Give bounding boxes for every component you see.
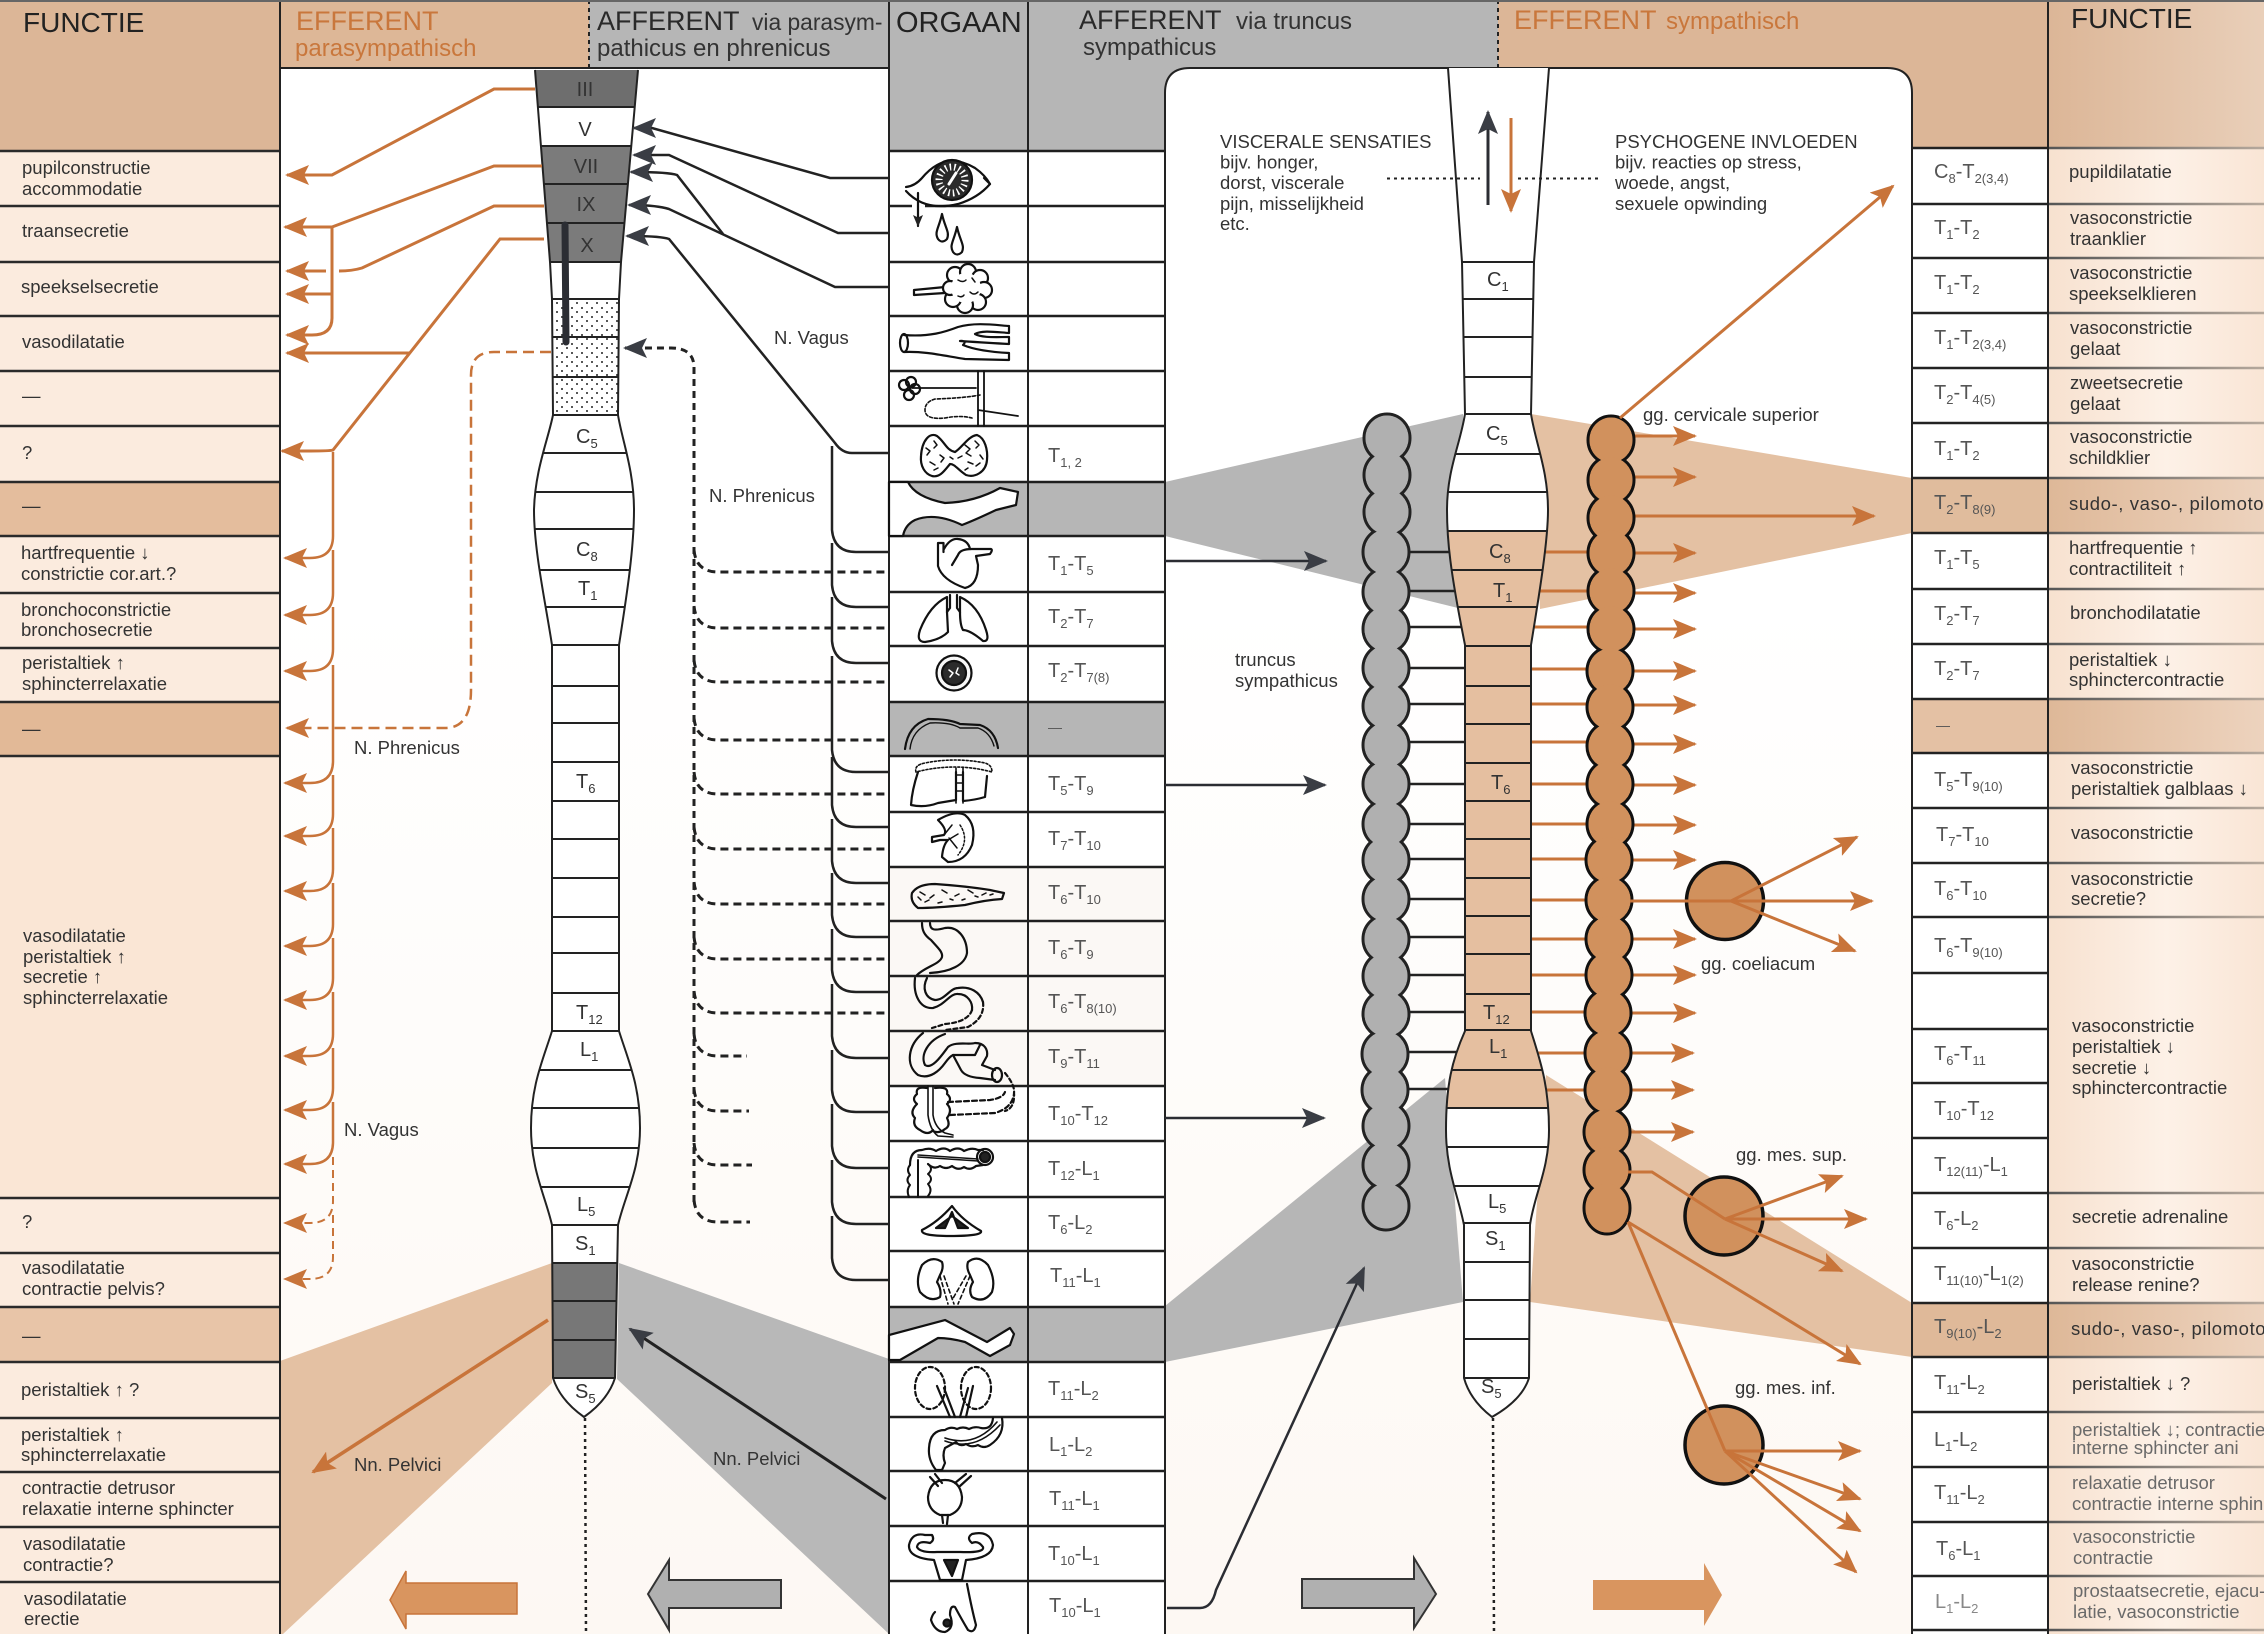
function: uterus: contractie [2073, 1547, 2153, 1568]
function: genitaal: vasodilatatie [24, 1588, 127, 1609]
function: ureter: peristaltiek ↑ ? [21, 1379, 139, 1400]
segment: slokdarm: T2-T7 [1934, 658, 1980, 683]
segment: uterus: T10-L1 [1048, 1543, 1100, 1568]
segment: milt: T7-T10 [1936, 824, 1989, 849]
fan: sympathetic efferent lower [1530, 1075, 1912, 1357]
text: psychogene invloeden: sexuele opwinding [1615, 193, 1767, 214]
heading: afferent via truncus: via truncus [1236, 8, 1352, 35]
segment: long: T2-T7 [1934, 603, 1980, 628]
label: gg. cervicale superior: gg. cervicale superior [1643, 404, 1819, 425]
function: skin none: — [22, 495, 41, 516]
cord labels right: T12 [1483, 1002, 1510, 1027]
icon: caecum [912, 1086, 1014, 1137]
cord labels left: IX [577, 194, 595, 216]
segment: bijnier: T6-L2 [1934, 1208, 1978, 1233]
function: schildklier: schildklier [2069, 447, 2150, 468]
labels: nerves and ganglia [344, 131, 1858, 1475]
visceral up and down arrows [1488, 112, 1511, 211]
icon: oesophagus cross-section [936, 656, 972, 690]
function: blaas: relaxatie interne sphincter [22, 1498, 234, 1519]
icon: duodenum [915, 978, 983, 1030]
heading: afferent via truncus: sympathicus [1083, 34, 1216, 61]
segment: sigmoid: L1-L2 [1934, 1429, 1977, 1454]
afferent branch [631, 172, 723, 234]
cord labels right [1481, 269, 1512, 1401]
arrows: ganglia outputs [1620, 186, 1893, 1572]
icon: ureters with dashed kidneys [915, 1367, 991, 1417]
arrow: mes sup level [1725, 1218, 1866, 1220]
segment: speekselklier: T1-T2 [1934, 272, 1980, 297]
segment: pupil: C8-T2(3,4) [1934, 161, 2009, 186]
parasympathetic efferent nerves [282, 89, 551, 1472]
segment: pancreas: T6-T10 [1934, 878, 1987, 903]
function: slokdarm: peristaltiek ↓ [2069, 649, 2172, 670]
icon: kidneys [918, 1259, 993, 1304]
headings [23, 3, 2192, 62]
arrow: liver level [1165, 784, 1325, 786]
segment: bladder: T11-L1 [1049, 1488, 1100, 1513]
cord labels right: C5 [1486, 423, 1508, 448]
arrow: colon level [1165, 1117, 1324, 1119]
arrow: mes sup up [1725, 1176, 1842, 1219]
arrow: mes inf 4 [1725, 1451, 1856, 1572]
arrow: heart level [1165, 560, 1326, 562]
dotted filum left [585, 1418, 586, 1634]
icon: thyroid [921, 435, 987, 476]
function: digestive block: sphincterrelaxatie [23, 987, 168, 1008]
segment: gelaat zweet: T2-T4(5) [1934, 382, 1995, 407]
text: psychogene invloeden: bijv. reacties op stress, [1615, 152, 1802, 172]
segment: male genital: T10-L1 [1049, 1595, 1101, 1620]
segment: diaphragm: — [1048, 719, 1062, 735]
column: left functions [21, 157, 234, 1629]
segment: schildklier: T1-T2 [1934, 438, 1980, 463]
segment: caecum: T10-T12 [1048, 1103, 1108, 1128]
icon: jejunum [910, 1033, 1014, 1111]
cord labels left: III [577, 79, 593, 101]
arrow: through coeliacum [1630, 900, 1872, 902]
cord labels right: S5 [1481, 1376, 1502, 1401]
function: blaas: relaxatie detrusor [2072, 1472, 2215, 1493]
function: bronchus: bronchoconstrictie [21, 599, 171, 620]
icon: leg [889, 1320, 1014, 1360]
segment: blaas: T11-L2 [1934, 1482, 1985, 1507]
function: lever: vasoconstrictie [2071, 757, 2193, 778]
arrow: mes inf level [1725, 1450, 1860, 1452]
branch VII down [287, 228, 332, 335]
segment: thyroid: T1, 2 [1048, 445, 1082, 470]
function: speekselklieren: speekselklieren [2069, 283, 2197, 304]
arrow: genital to truncus [1167, 1268, 1364, 1608]
Nn. Pelvici efferent [313, 1320, 548, 1472]
segment: nier: T11(10)-L1(2) [1934, 1263, 2024, 1288]
icon: heart [938, 539, 992, 588]
vagus dashed branches [285, 1157, 333, 1223]
function: zweetsecretie: zweetsecretie [2070, 372, 2183, 393]
segment: heart: T1-T5 [1048, 553, 1094, 578]
segment: adrenal: T6-L2 [1048, 1212, 1092, 1237]
function: speekselklieren: vasoconstrictie [2070, 262, 2192, 283]
segment: colon: T12(11)-L1 [1934, 1154, 2008, 1179]
icon: salivary gland [914, 264, 992, 313]
afferent to IX [629, 205, 889, 287]
parasympathetic afferent nerves [625, 128, 889, 1499]
dotted filum right [1493, 1418, 1494, 1634]
table: right sympathetic grid [1912, 148, 2264, 1634]
function: colon: peristaltiek ↑ [21, 1424, 124, 1445]
spinal cord: left [530, 70, 641, 1418]
function: genitaal: latie, vasoconstrictie [2073, 1601, 2240, 1622]
label: gg. mes. inf.: gg. mes. inf. [1735, 1377, 1836, 1398]
segment: kidney: T11-L1 [1050, 1265, 1101, 1290]
cord labels left: V [578, 119, 592, 141]
arrow: mes sup down [1725, 1219, 1842, 1271]
segment: jejunum: T6-T11 [1934, 1043, 1986, 1068]
afferent to V [634, 128, 889, 178]
heading: afferent via parasympathicus: via parasym- [752, 9, 882, 35]
icon: pancreas [912, 884, 1004, 908]
icon: diaphragm [905, 719, 998, 749]
icon: eye [906, 160, 990, 254]
heading: afferent via truncus: AFFERENT [1079, 5, 1222, 35]
text: viscerale sensaties: pijn, misselijkheid [1220, 193, 1364, 214]
function: pupil: accommodatie [22, 178, 142, 199]
segment: ureter: T11-L2 [1934, 1372, 1985, 1397]
function: pancreas: vasoconstrictie [2071, 868, 2193, 889]
nerve X [282, 239, 544, 451]
function: sigmoid: interne sphincter ani [2072, 1437, 2239, 1458]
header band: efferent parasympathisch [280, 0, 589, 68]
function: pupildilatatie: pupildilatatie [2069, 161, 2172, 182]
function: hart: hartfrequentie ↓ [21, 542, 150, 563]
table: left functie background [0, 151, 280, 1634]
icon: spleen [932, 813, 973, 862]
afferent vagus [627, 236, 889, 453]
cord labels right: T6 [1491, 772, 1510, 797]
header band: orgaan [889, 0, 1028, 151]
segment: ureter: T11-L2 [1048, 1378, 1099, 1403]
icon: arm [889, 482, 1018, 536]
function: bijnier unknown: ? [22, 1211, 32, 1232]
cord labels left: S1 [575, 1233, 596, 1258]
function: darm block: peristaltiek ↓ [2072, 1036, 2175, 1057]
function: genitaal: erectie [24, 1608, 80, 1629]
function: bronchus: bronchodilatatie [2070, 602, 2201, 623]
segment: maag: T6-T9(10) [1934, 935, 2003, 960]
header band: afferent truncus [1028, 0, 1498, 151]
function: adrenaline: secretie adrenaline [2072, 1206, 2228, 1227]
cord labels left: VII [574, 156, 598, 178]
function: digestive block: peristaltiek ↑ [23, 946, 126, 967]
arrow: chain into mes sup [1628, 1172, 1725, 1219]
table: organ grid [889, 151, 1165, 1634]
header band: efferent sympathisch [1498, 0, 2048, 148]
cord labels left: C8 [576, 539, 598, 564]
heading: afferent via parasympathicus: pathicus en phrenicus [597, 35, 830, 62]
ganglia: coeliacum, mes sup, mes inf circles [1685, 862, 1764, 1484]
arrow: mes inf 3 [1725, 1451, 1860, 1531]
heading: efferent parasympathisch: EFFERENT [296, 6, 439, 36]
label: N. Vagus efferent: N. Vagus [344, 1119, 419, 1140]
text: viscerale sensaties: dorst, viscerale [1220, 172, 1344, 193]
heading: afferent via parasympathicus: AFFERENT [597, 6, 740, 36]
fan: sympathetic efferent upper [1531, 414, 1912, 609]
cord labels right: C1 [1487, 269, 1509, 294]
cord labels left: L1 [580, 1039, 598, 1064]
spinal cord: right [1440, 68, 1555, 1417]
function: slokdarm: peristaltiek ↑ [22, 652, 125, 673]
arrows: afferent to truncus [1165, 561, 1364, 1608]
icon: lungs [919, 595, 987, 642]
text: viscerale sensaties: etc. [1220, 213, 1250, 234]
direction arrow: grey right [1302, 1558, 1436, 1628]
arrow: cervicale superior to head [1620, 186, 1893, 418]
segment: sigmoid: L1-L2 [1049, 1434, 1092, 1459]
cord labels left: T6 [576, 771, 595, 796]
label: truncus sympathicus: sympathicus [1235, 670, 1338, 691]
icon: colon [908, 1148, 993, 1197]
label: gg. coeliacum: gg. coeliacum [1701, 953, 1815, 974]
segment: colon: T12-L1 [1048, 1158, 1100, 1183]
heading: efferent parasympathisch: parasympathisch [295, 35, 476, 62]
truncus sympathicus chain: grey [1362, 414, 1410, 1230]
segment: duodenum: T6-T8(10) [1048, 991, 1117, 1016]
function: sigmoid: peristaltiek ↓; contractie [2072, 1419, 2264, 1440]
label: gg. mes. sup.: gg. mes. sup. [1736, 1144, 1847, 1165]
heading: orgaan: ORGAAN [896, 7, 1022, 39]
label: Nn. Pelvici afferent: Nn. Pelvici [713, 1448, 800, 1469]
arrow: chain into mes inf [1628, 1222, 1725, 1451]
icon: uterus [909, 1533, 993, 1580]
text: psychogene invloeden: PSYCHOGENE INVLOEDEN [1615, 131, 1858, 152]
function: hart: hartfrequentie ↑ [2069, 537, 2198, 558]
function: zweetsecretie: gelaat [2070, 393, 2120, 414]
vagus nucleus bar [565, 225, 566, 342]
segment: pancreas: T6-T10 [1048, 882, 1101, 907]
function: uterus: contractie? [23, 1554, 114, 1575]
afferent to VII [634, 155, 889, 233]
direction arrow: orange right [1593, 1563, 1722, 1626]
segment: genitaal: L1-L2 [1935, 1591, 1978, 1616]
phrenicus afferent main [625, 348, 694, 1202]
function: hart: contractiliteit ↑ [2069, 558, 2186, 579]
label: N. Phrenicus afferent: N. Phrenicus [709, 485, 815, 506]
cord labels right: C8 [1489, 541, 1511, 566]
function: colon: sphincterrelaxatie [21, 1444, 166, 1465]
fan: sympathetic afferent lower [1165, 1078, 1463, 1362]
segment: lungs: T2-T7 [1048, 606, 1094, 631]
function: bronchus: bronchosecretie [21, 619, 153, 640]
function: uterus: vasoconstrictie [2073, 1526, 2195, 1547]
function: pupil: pupilconstructie [22, 157, 151, 178]
fan: parasympathetic afferent sacral [617, 1263, 889, 1634]
segment: uterus: T6-L1 [1936, 1538, 1980, 1563]
label: N. Phrenicus efferent: N. Phrenicus [354, 737, 460, 758]
organ icons [889, 160, 1018, 1632]
cord labels left: X [580, 235, 594, 257]
truncus sympathicus chain: orange [1584, 416, 1634, 1234]
function: vasodilatatie: vasodilatatie [22, 331, 125, 352]
icon: stomach [917, 923, 967, 975]
nerve VII [285, 166, 542, 227]
arrow: chain to skin lower [1628, 1222, 1860, 1364]
function: milt: vasoconstrictie [2071, 822, 2193, 843]
header band: afferent parasympathicus [589, 0, 889, 68]
cord labels left: S5 [575, 1381, 596, 1406]
heading: efferent sympathisch: EFFERENT [1514, 5, 1657, 35]
efferent output arrows from orange chain [1628, 436, 1874, 1132]
icon: adrenal [922, 1206, 981, 1236]
function: pancreas: secretie? [2071, 888, 2146, 909]
segment: caecum: T10-T12 [1934, 1098, 1994, 1123]
segment: oesophagus: T2-T7(8) [1048, 660, 1109, 685]
fan: parasympathetic efferent sacral [280, 1263, 552, 1634]
segment: stomach: T6-T9 [1048, 937, 1094, 962]
segment: arm: T2-T8(9) [1934, 492, 1995, 517]
function: been none: — [22, 1325, 41, 1346]
function: darm block: sphinctercontractie [2072, 1077, 2227, 1098]
cord labels left: T1 [578, 578, 597, 603]
label: truncus sympathicus: truncus [1235, 649, 1296, 670]
function: unknown: ? [22, 442, 32, 463]
function: traanklier: traanklier [2070, 228, 2146, 249]
column: right functions [2069, 161, 2264, 1622]
arrow: coeliacum down [1731, 901, 1855, 951]
function: slokdarm: sphinctercontractie [2069, 669, 2224, 690]
function: hart: constrictie cor.art.? [21, 563, 176, 584]
function: genitaal: prostaatsecretie, ejacu- [2073, 1580, 2264, 1601]
text: viscerale sensaties: VISCERALE SENSATIES [1220, 131, 1431, 152]
heading: functie right: FUNCTIE [2071, 3, 2192, 34]
solid afferent hooks to organ column [832, 446, 889, 1280]
phrenicus afferent branches [694, 550, 889, 1222]
label: Nn. Pelvici efferent: Nn. Pelvici [354, 1454, 441, 1475]
function: uterus: vasodilatatie [23, 1533, 126, 1554]
cord labels left [574, 79, 603, 1406]
icon: male genital [931, 1584, 976, 1632]
segment: liver: T5-T9 [1048, 773, 1094, 798]
function: nier: contractie pelvis? [22, 1278, 165, 1299]
function: traanklier: vasoconstrictie [2070, 207, 2192, 228]
heading: efferent sympathisch: sympathisch [1666, 8, 1799, 35]
function: nier: vasodilatatie [22, 1257, 125, 1278]
stubs: grey chain to cord [1405, 552, 1470, 1089]
cord labels right: L1 [1489, 1036, 1507, 1061]
function: none: — [22, 385, 41, 406]
direction arrow: orange left [390, 1571, 517, 1629]
segment: spleen: T7-T10 [1048, 828, 1101, 853]
function: ureter: peristaltiek ↓ ? [2072, 1373, 2190, 1394]
text: psychogene invloeden: woede, angst, [1614, 172, 1730, 193]
function: darm block: secretie ↓ [2072, 1057, 2151, 1078]
function: speeksel: speekselsecretie [21, 276, 159, 297]
segment: hart: T1-T5 [1934, 547, 1980, 572]
function: slokdarm: sphincterrelaxatie [22, 673, 167, 694]
function: traan: traansecretie [22, 220, 129, 241]
segment: diafragma: — [1936, 717, 1950, 733]
text: viscerale sensaties: bijv. honger, [1220, 152, 1318, 172]
function: nier: release renine? [2072, 1274, 2200, 1295]
nerve III [287, 89, 535, 175]
segment: been: T9(10)-L2 [1934, 1316, 2002, 1341]
cord labels left: L5 [577, 1194, 595, 1219]
function: gelaat: vasoconstrictie [2070, 317, 2192, 338]
segment: jejunum: T9-T11 [1048, 1046, 1100, 1071]
function: darm block: vasoconstrictie [2072, 1015, 2194, 1036]
icon: sigmoid colon [929, 1418, 1002, 1470]
header band: functie left [0, 0, 280, 151]
stubs: cord to orange chain [1525, 552, 1590, 1090]
function: lever: peristaltiek galblaas ↓ [2071, 778, 2248, 799]
icon: bladder [928, 1474, 971, 1524]
vagus branches [285, 452, 333, 558]
cord labels left: T12 [576, 1002, 603, 1027]
label: N. Vagus afferent: N. Vagus [774, 327, 849, 348]
fan: sympathetic afferent upper [1165, 414, 1463, 608]
phrenicus efferent [287, 352, 551, 728]
segment: lever: T5-T9(10) [1934, 769, 2003, 794]
cord labels right: T1 [1493, 580, 1512, 605]
column: efferent sympathetic segments [1934, 161, 2024, 1616]
cord labels left: C5 [576, 426, 598, 451]
nerve IX [287, 206, 544, 271]
icon: liver [911, 760, 992, 806]
function: blaas: contractie detrusor [22, 1477, 175, 1498]
function: gelaat: gelaat [2070, 338, 2120, 359]
function: digestive block: vasodilatatie [23, 925, 126, 946]
arrow: mes inf 2 [1725, 1451, 1860, 1499]
icon: blood vessel [900, 324, 1009, 360]
function: nier: vasoconstrictie [2072, 1253, 2194, 1274]
direction arrow: grey left [648, 1560, 781, 1630]
function: schildklier: vasoconstrictie [2070, 426, 2192, 447]
dotted connector sensations [1387, 178, 1601, 180]
heading: functie left: FUNCTIE [23, 7, 144, 38]
segment: traanklier: T1-T2 [1934, 217, 1980, 242]
segment: gelaat vaat: T1-T2(3,4) [1934, 327, 2006, 352]
icon: gland and duct [899, 371, 1018, 426]
Nn. Pelvici afferent [630, 1329, 886, 1499]
cord labels right: L5 [1488, 1191, 1506, 1216]
column: afferent segments [1048, 445, 1117, 1620]
function: digestive block: secretie ↑ [23, 966, 102, 987]
branch VII middle [287, 292, 332, 296]
function: diafragma none: — [22, 718, 41, 739]
cord labels right: S1 [1485, 1228, 1506, 1253]
arrow: coeliacum up [1731, 837, 1857, 901]
header band: functie right [2048, 0, 2264, 148]
nerve X branch [287, 352, 409, 354]
